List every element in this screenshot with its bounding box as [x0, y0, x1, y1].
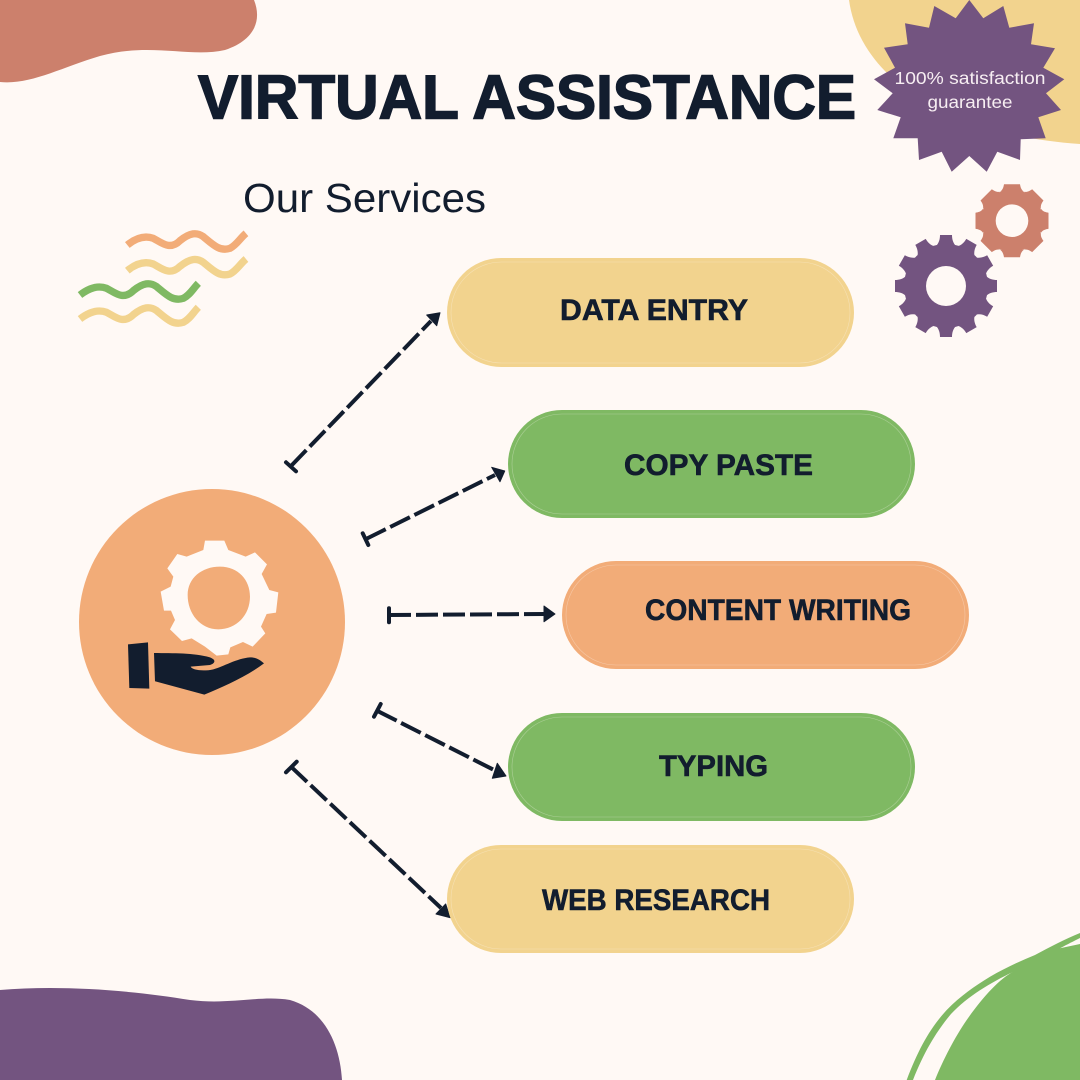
pill: data entry [447, 258, 854, 367]
pill: data entry: DATA ENTRY [560, 294, 748, 327]
pill: content writing [562, 561, 969, 669]
pill: content writing: CONTENT WRITING [645, 594, 911, 627]
pill: typing [508, 713, 915, 821]
blob: top right yellow [849, 0, 1080, 144]
subtitle: Our Services [243, 175, 486, 221]
icon: purple gear [895, 235, 997, 337]
blob: bottom right green [907, 933, 1080, 1080]
pill: copy paste: COPY PASTE [624, 449, 813, 482]
arrow: to typing [374, 704, 506, 778]
blob: bottom left purple [0, 988, 342, 1080]
blob: top left [0, 0, 257, 82]
pill: copy paste [508, 410, 915, 518]
icon: hand [128, 642, 264, 695]
arrow: to content writing [389, 606, 555, 622]
decorative waves [80, 233, 246, 323]
panel: central icon circle [79, 489, 345, 755]
arrow: to web research [286, 762, 450, 918]
pill: typing: TYPING [659, 750, 768, 783]
icon: red gear [976, 184, 1048, 257]
badge: satisfaction guarantee: guarantee [928, 92, 1012, 112]
pill: web research [447, 845, 854, 953]
arrow: to copy paste [363, 467, 505, 545]
badge: satisfaction guarantee [874, 0, 1064, 172]
arrow: to data entry [286, 313, 440, 471]
title: VIRTUAL ASSISTANCE [198, 64, 856, 132]
badge: satisfaction guarantee: 100% satisfaction [894, 68, 1046, 88]
pill: web research: WEB RESEARCH [542, 884, 770, 917]
icon: white gear [161, 541, 278, 656]
